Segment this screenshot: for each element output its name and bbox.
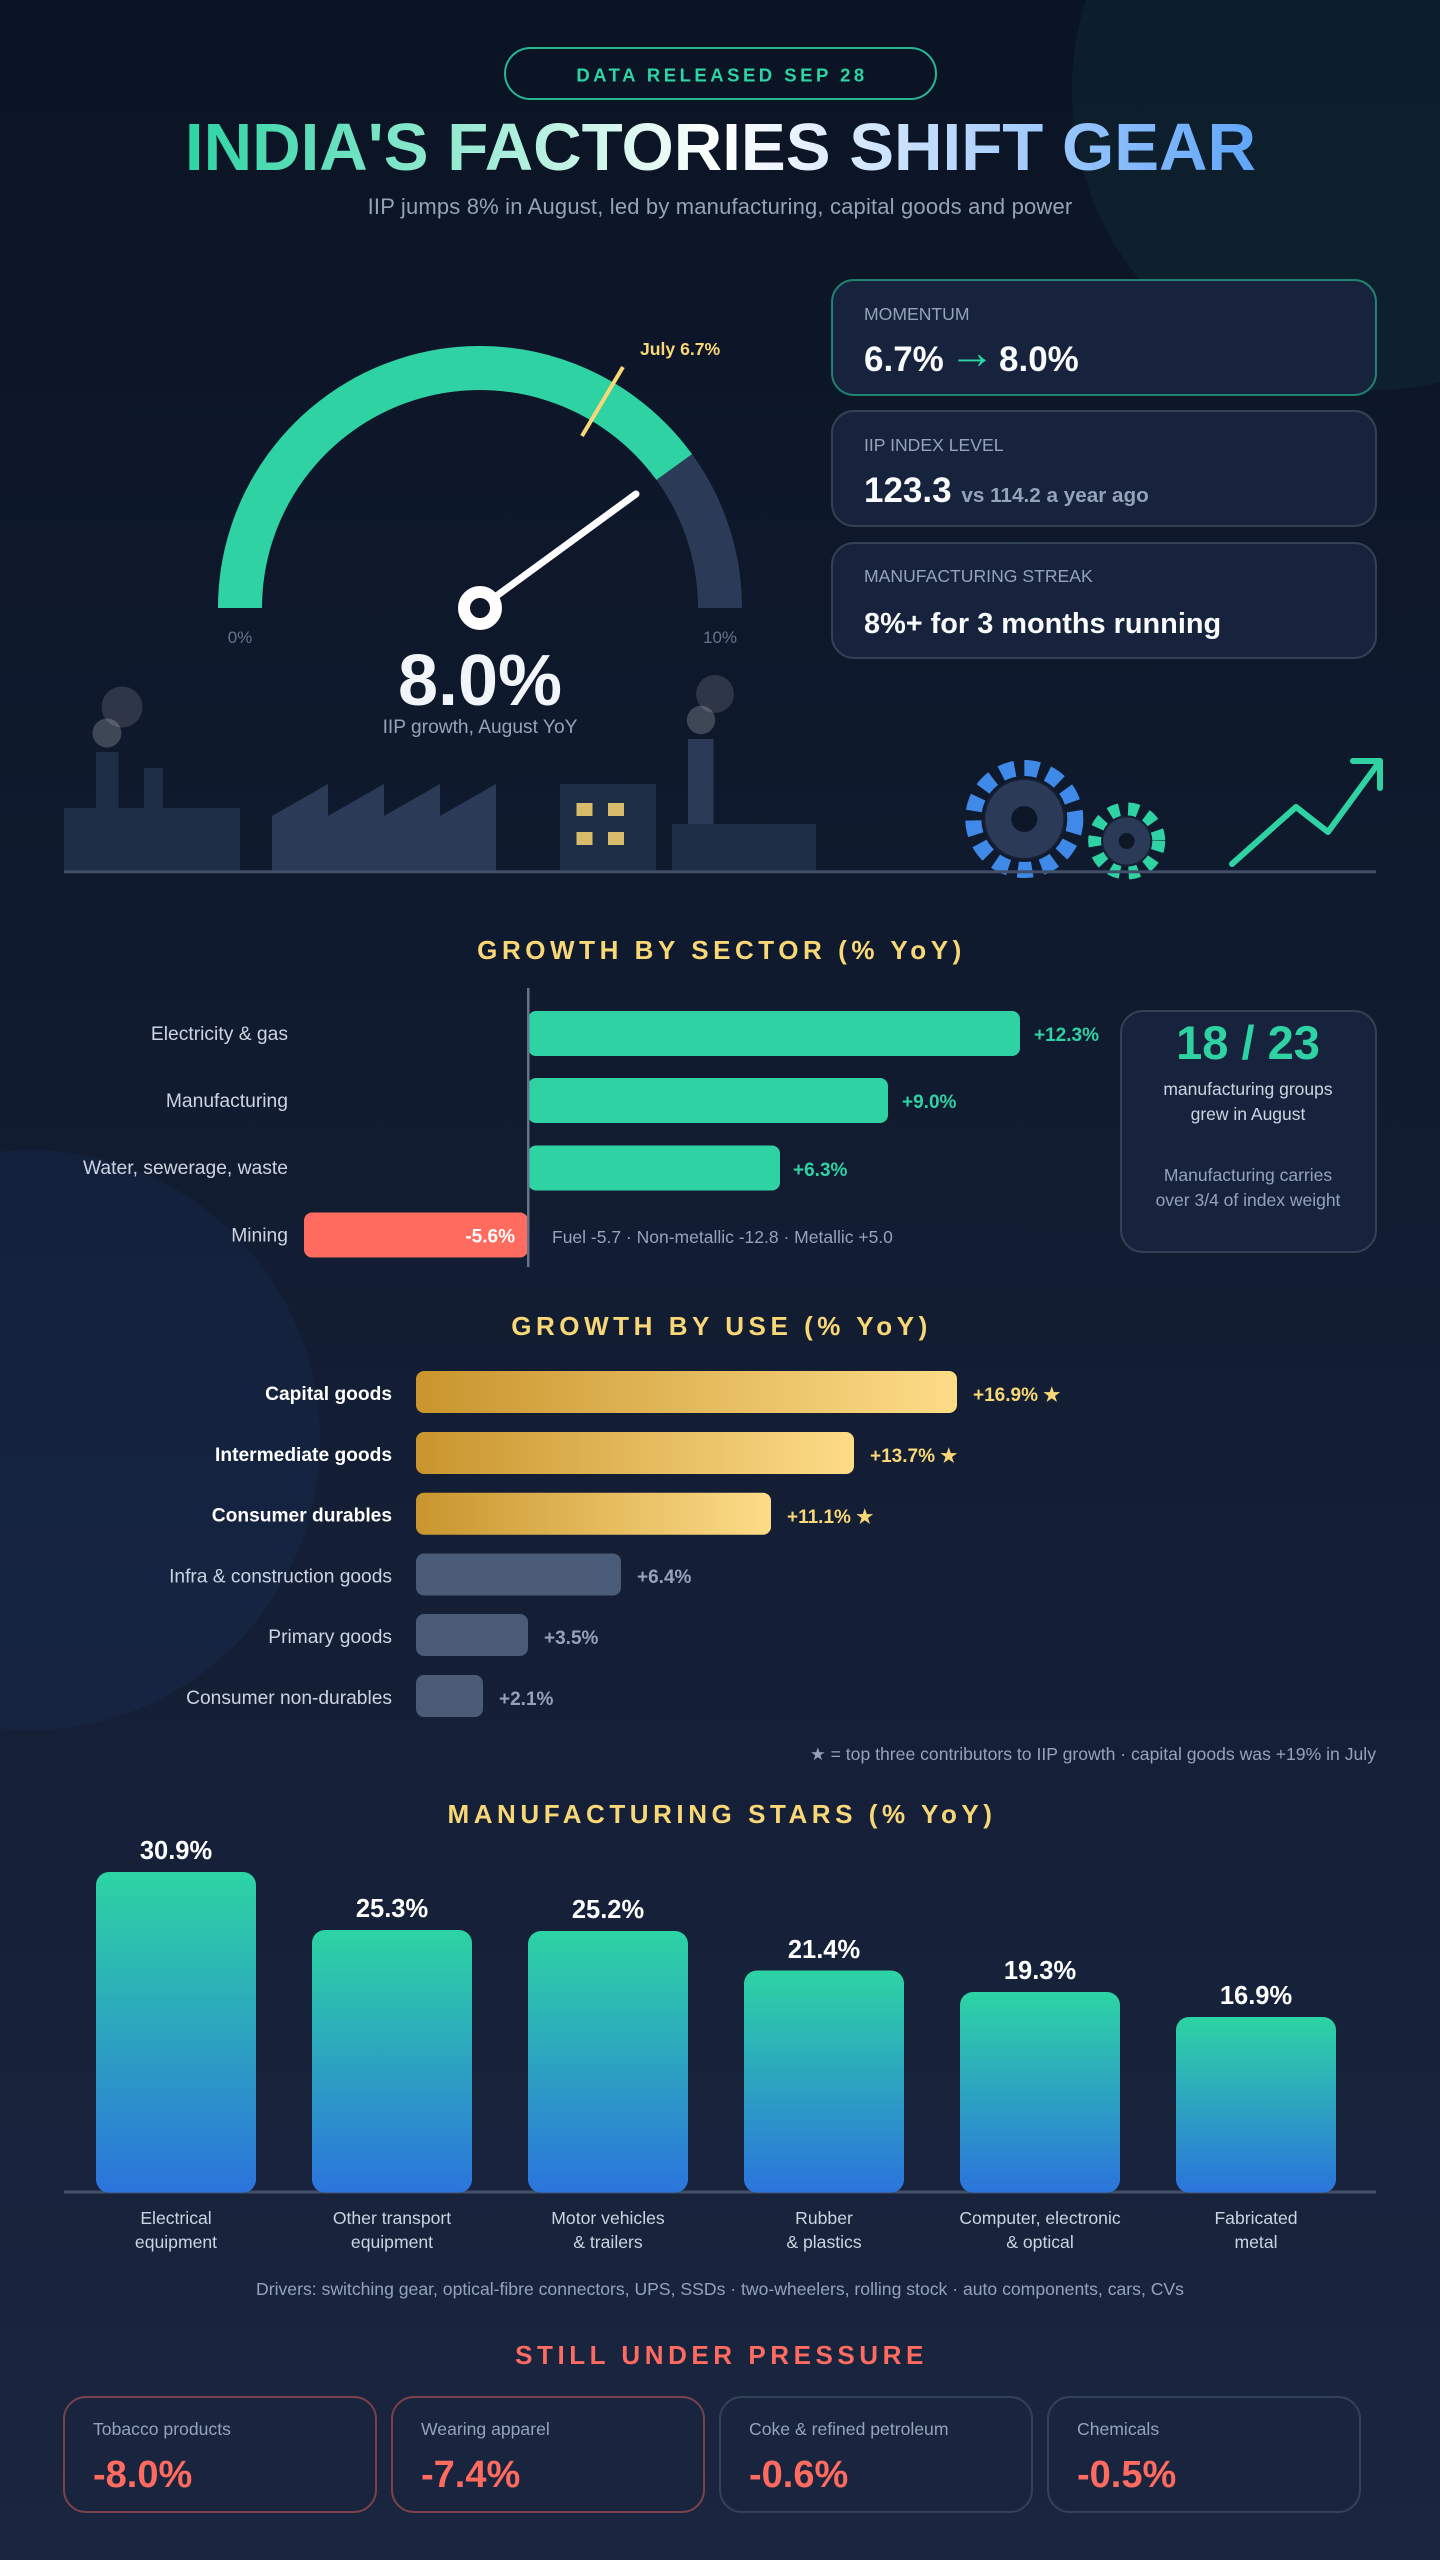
card: index level: 123.3 vs 114.2 a year ago — [864, 471, 1149, 510]
sector row: water — [83, 1146, 848, 1190]
ground line — [64, 870, 1376, 873]
star bar: other transport: equipment — [351, 2232, 433, 2252]
card: streak: 8%+ for 3 months running — [864, 608, 1221, 640]
gear large — [973, 768, 1075, 870]
card: momentum: 6.7% — [864, 340, 944, 379]
star bar: electrical: 30.9% — [140, 1837, 212, 1865]
needle — [480, 494, 636, 608]
header badge — [505, 48, 936, 99]
card: momentum: MOMENTUM — [864, 304, 970, 324]
card: chemicals: -0.5% — [1077, 2454, 1176, 2496]
star bar: electrical — [96, 1837, 256, 2252]
chart: manufacturing stars — [64, 1837, 1376, 2252]
star bar: electrical: equipment — [135, 2232, 217, 2252]
use row: intermediate goods: +13.7% ★ — [870, 1446, 957, 1467]
gauge track — [240, 368, 720, 608]
use row: primary — [268, 1614, 599, 1656]
growth arrow — [1232, 761, 1380, 864]
sawtooth factory — [272, 784, 496, 871]
star bar: computer: Computer, electronic — [959, 2208, 1121, 2228]
footnote: use: ★ = top three contributors to IIP growth · capital goods was +19% in July — [810, 1744, 1376, 1764]
factory left — [64, 752, 240, 871]
sector row: mining — [231, 1212, 893, 1258]
sector row: electricity: +12.3% — [1034, 1025, 1099, 1046]
card: tobacco — [64, 2397, 376, 2512]
gauge value: 8.0% — [398, 641, 562, 721]
smoke left — [92, 686, 142, 748]
use row: consumer durables: +11.1% ★ — [787, 1507, 873, 1528]
use row: consumer durables: Consumer durables — [212, 1506, 392, 1526]
card: momentum — [832, 280, 1376, 395]
star bar: other transport: Other transport — [333, 2208, 451, 2228]
panel: manufacturing groups: grew in August — [1191, 1104, 1306, 1124]
needle hub — [464, 592, 496, 624]
card: tobacco: Tobacco products — [93, 2419, 231, 2439]
star bar: motor vehicles — [528, 1896, 688, 2252]
heading: still under pressure: STILL UNDER PRESSURE — [515, 2340, 928, 2370]
July label: July 6.7% — [640, 339, 721, 359]
star bar: other transport — [312, 1895, 472, 2252]
card: coke and petroleum — [720, 2397, 1032, 2512]
use row: capital goods: Capital goods — [265, 1384, 392, 1405]
header badge: DATA RELEASED SEP 28 — [576, 64, 868, 86]
card: streak: MANUFACTURING STREAK — [864, 566, 1093, 586]
star bar: rubber: Rubber — [795, 2208, 853, 2228]
use row: non-durables — [186, 1675, 554, 1717]
July marker — [582, 367, 623, 436]
use row: infra: +6.4% — [637, 1567, 692, 1588]
gear small — [1095, 809, 1159, 873]
gauge value arc — [240, 368, 674, 608]
star bar: fabricated metal: Fabricated — [1214, 2208, 1298, 2228]
drivers note: Drivers: switching gear, optical-fibre connectors, UPS, SSDs · two-wheelers, rolling stock · auto components, cars, CVs — [256, 2279, 1184, 2299]
sector row: mining: Mining — [231, 1226, 288, 1246]
card: chemicals: Chemicals — [1077, 2419, 1159, 2439]
use row: consumer durables — [212, 1493, 873, 1535]
card: apparel — [392, 2397, 704, 2512]
card: index level: IIP INDEX LEVEL — [864, 435, 1004, 455]
card: apparel: -7.4% — [421, 2454, 520, 2496]
star bar: computer: 19.3% — [1004, 1957, 1076, 1985]
sector row: manufacturing: Manufacturing — [166, 1091, 288, 1112]
title: INDIA'S FACTORIES SHIFT GEAR — [185, 110, 1256, 185]
factory skyline — [64, 675, 1380, 873]
sector row: manufacturing — [166, 1078, 957, 1123]
star bar: motor vehicles: Motor vehicles — [551, 2208, 665, 2228]
card: apparel: Wearing apparel — [421, 2419, 550, 2439]
use row: infra — [169, 1554, 692, 1596]
star bar: rubber: & plastics — [786, 2232, 862, 2252]
scale max: 10% — [703, 628, 737, 647]
panel: manufacturing groups: over 3/4 of index weight — [1156, 1190, 1341, 1210]
scale min: 0% — [228, 628, 252, 647]
use row: primary: +3.5% — [544, 1628, 599, 1649]
panel: manufacturing groups: Manufacturing carries — [1164, 1165, 1332, 1185]
heading: growth by sector: GROWTH BY SECTOR (% YoY) — [477, 935, 966, 965]
star bar: fabricated metal — [1176, 1982, 1336, 2252]
subtitle: IIP jumps 8% in August, led by manufacturing, capital goods and power — [368, 194, 1072, 219]
star bar: other transport: 25.3% — [356, 1895, 428, 1923]
sector row: electricity — [151, 1011, 1099, 1056]
use row: infra: Infra & construction goods — [169, 1566, 392, 1588]
star bar: motor vehicles: & trailers — [573, 2232, 643, 2252]
smoke right — [687, 675, 734, 734]
heading: manufacturing stars: MANUFACTURING STARS (% YoY) — [448, 1799, 996, 1829]
card: index level — [832, 411, 1376, 526]
use row: intermediate goods — [215, 1432, 957, 1474]
office building — [560, 784, 656, 871]
sector row: water: Water, sewerage, waste — [83, 1158, 288, 1179]
star bar: fabricated metal: metal — [1234, 2232, 1278, 2252]
star bar: fabricated metal: 16.9% — [1220, 1982, 1292, 2010]
use row: capital goods — [265, 1371, 1060, 1413]
axis — [527, 988, 530, 1267]
card: streak — [832, 543, 1376, 658]
panel: manufacturing groups: 18 / 23 — [1176, 1016, 1320, 1069]
sector row: water: +6.3% — [793, 1160, 848, 1181]
sector row: manufacturing: +9.0% — [902, 1092, 957, 1113]
sector row: electricity: Electricity & gas — [151, 1024, 288, 1045]
factory right — [672, 739, 816, 871]
star bar: rubber — [744, 1936, 904, 2252]
card: tobacco: -8.0% — [93, 2454, 192, 2496]
card: momentum: → — [949, 326, 995, 378]
chart: growth by use — [169, 1371, 1060, 1717]
star bar: electrical: Electrical — [140, 2208, 212, 2228]
use row: capital goods: +16.9% ★ — [973, 1385, 1060, 1406]
star bar: motor vehicles: 25.2% — [572, 1896, 644, 1924]
use row: non-durables: Consumer non-durables — [186, 1688, 392, 1709]
use row: non-durables: +2.1% — [499, 1689, 554, 1710]
sector row: mining: -5.6% — [465, 1226, 515, 1248]
panel: manufacturing groups: manufacturing groups — [1163, 1079, 1333, 1099]
star bar: computer: & optical — [1006, 2232, 1074, 2252]
gauge caption: IIP growth, August YoY — [383, 717, 578, 738]
card: coke and petroleum: -0.6% — [749, 2454, 848, 2496]
card: chemicals — [1048, 2397, 1360, 2512]
use row: intermediate goods: Intermediate goods — [215, 1445, 392, 1466]
star bar: rubber: 21.4% — [788, 1936, 860, 1964]
card: coke and petroleum: Coke & refined petroleum — [749, 2419, 949, 2439]
gauge — [228, 339, 737, 738]
panel: manufacturing groups — [1121, 1011, 1376, 1252]
sector row: mining: Fuel -5.7 · Non-metallic -12.8 · Metallic +5.0 — [552, 1227, 893, 1247]
use row: primary: Primary goods — [268, 1627, 392, 1648]
heading: growth by use: GROWTH BY USE (% YoY) — [511, 1311, 932, 1341]
star bar: computer — [959, 1957, 1121, 2252]
card: momentum: 8.0% — [999, 340, 1079, 379]
chart: growth by sector — [83, 988, 1099, 1267]
